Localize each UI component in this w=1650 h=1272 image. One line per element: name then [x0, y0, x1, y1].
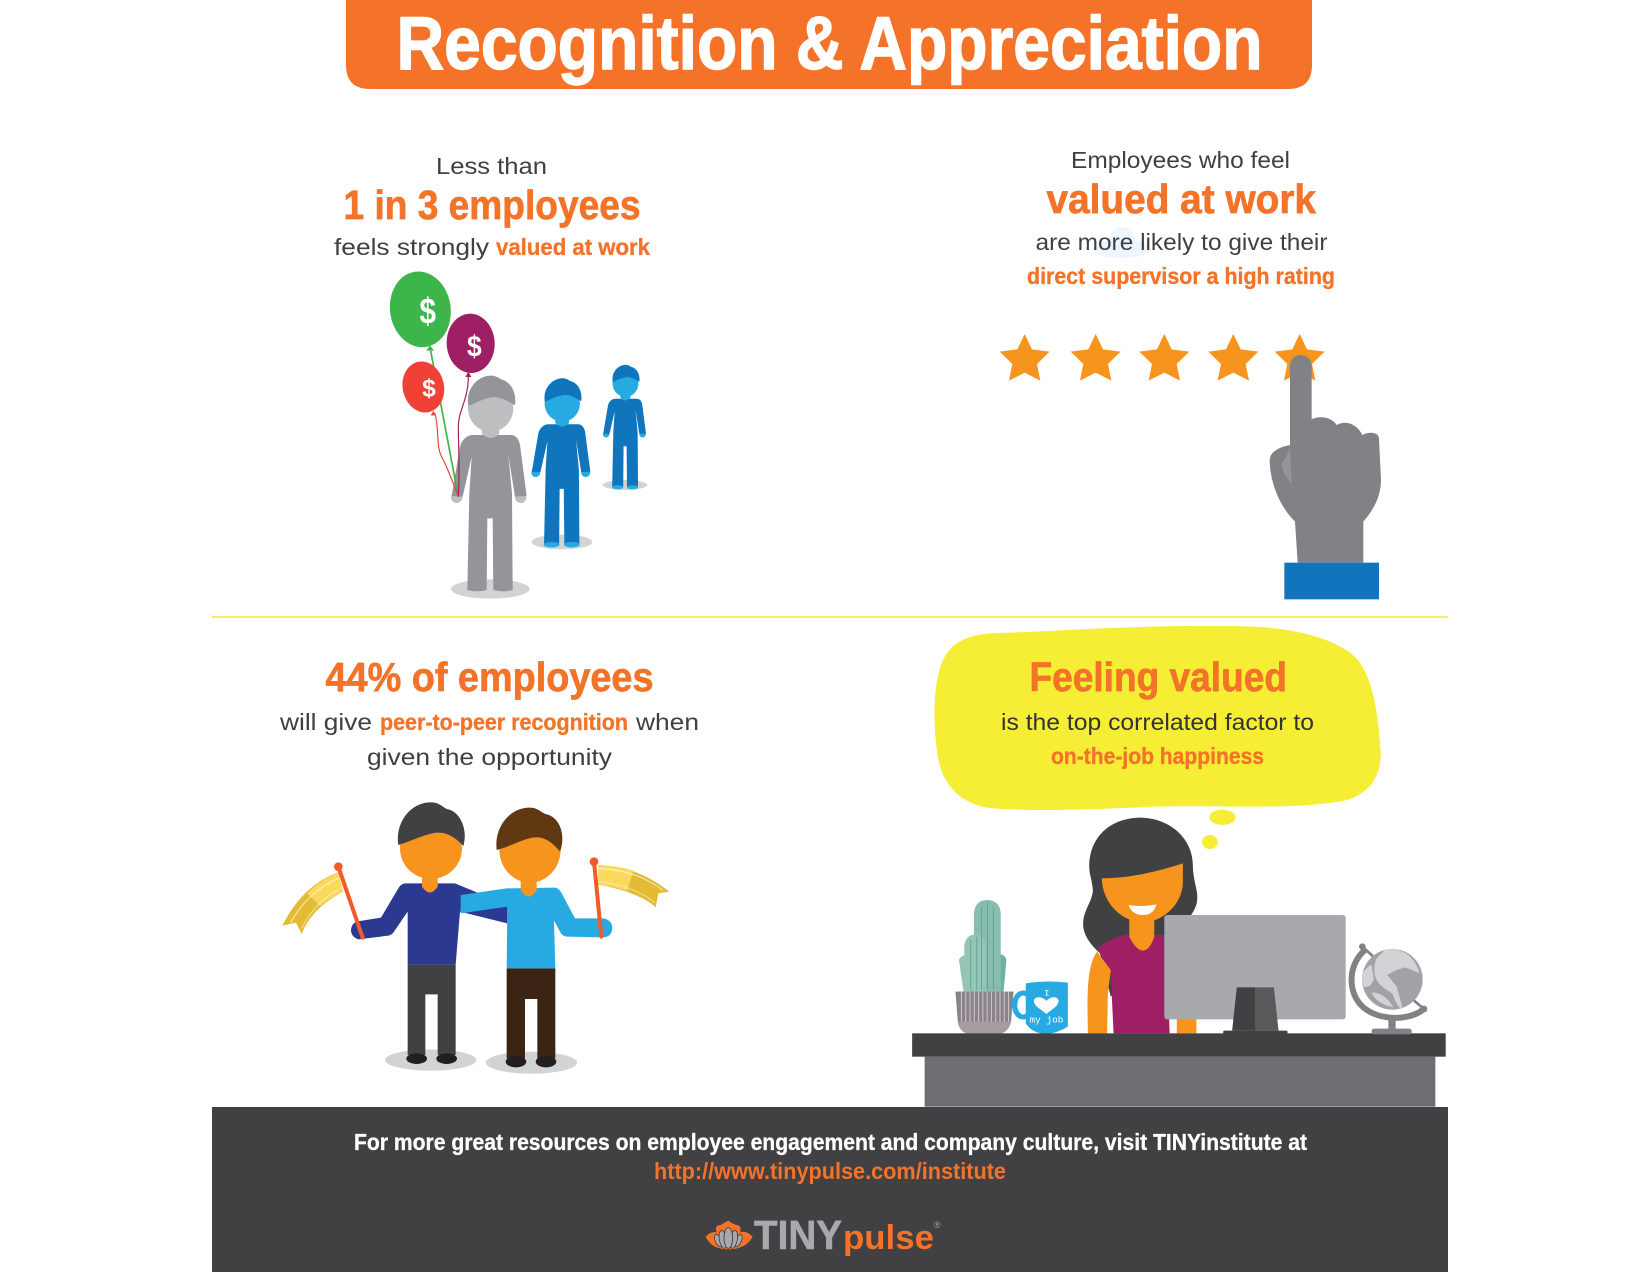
text: peer-to-peer recognition line: will give: [279, 709, 372, 735]
mug: my job: [1029, 1015, 1064, 1026]
text: feels strongly valued at work: valued at work: [496, 234, 651, 260]
five stars: [1000, 334, 1325, 381]
desk: [912, 1033, 1446, 1107]
heading: 1 in 3 employees: 1 in 3 employees: [344, 182, 640, 228]
ground shadows: [385, 1049, 577, 1074]
text: on-the-job happiness: on-the-job happiness: [1051, 743, 1264, 769]
illustration: desk scene: [912, 810, 1446, 1107]
text: given the opportunity: given the opportunity: [367, 744, 612, 770]
heading: 44% of employees: 44% of employees: [326, 654, 654, 700]
smudge: faint cloud behind text: [1093, 227, 1151, 258]
text: employees who feel: Employees who feel: [1071, 147, 1290, 173]
text: peer-to-peer recognition line: [279, 709, 699, 735]
speech bubble: [934, 626, 1381, 810]
footer panel: [212, 1107, 1448, 1272]
globe: [1352, 943, 1427, 1034]
text: top correlated factor: is the top correlated factor to: [1001, 709, 1314, 735]
text: feels strongly valued at work: feels strongly: [334, 234, 489, 260]
logo: TINYpulse: [706, 1212, 941, 1258]
cactus in pot: [955, 900, 1014, 1035]
monitor: [1164, 915, 1346, 1034]
wordmark: pulse: pulse: [843, 1219, 934, 1257]
flag: left ribbon: [282, 872, 343, 934]
mug: I: [1044, 989, 1050, 999]
text: direct supervisor: direct supervisor a high rating: [1027, 263, 1335, 289]
panel: one in three employees: [334, 153, 651, 599]
footer text: For more great resources on employee engagement and company culture, visit TINYinstitute at: [354, 1129, 1307, 1155]
text: feels strongly valued at work: [334, 234, 651, 260]
footer link: http://www.tinypulse.com/institute: [654, 1158, 1006, 1184]
panel: valued at work rating: [1000, 147, 1381, 599]
registered mark: ®: [934, 1220, 941, 1230]
figure: grey person: [451, 376, 527, 591]
wordmark: TINY: TINY: [754, 1212, 842, 1258]
mug: [1015, 981, 1068, 1034]
text: more likely: are more likely to give their: [1036, 229, 1328, 255]
heading: valued at work: valued at work: [1046, 176, 1316, 222]
illustration: two people with flags: [282, 802, 669, 1074]
illustration: people and balloons: [385, 267, 647, 599]
person: dark blue shirt: [351, 802, 507, 1064]
icon: lotus: [706, 1221, 753, 1249]
divider line: [212, 616, 1448, 618]
panel: feeling valued: [912, 626, 1446, 1107]
flag poles: [334, 857, 601, 938]
title banner: Recognition & Appreciation: [396, 1, 1262, 85]
ground shadows: [451, 480, 647, 599]
text: less than: Less than: [436, 153, 547, 179]
thought bubbles: [1202, 810, 1236, 849]
balloon strings: [431, 351, 468, 497]
figure: far blue person: [603, 365, 646, 489]
balloon: green: $: [419, 290, 436, 331]
woman: [1083, 818, 1197, 1033]
balloon: red: $: [422, 374, 436, 402]
flag: right ribbon: [598, 865, 669, 907]
figure: middle blue person: [531, 378, 590, 548]
pointing hand: [1270, 355, 1381, 599]
panel: peer-to-peer recognition: [279, 654, 699, 1074]
balloon: green: [385, 267, 456, 351]
balloon: purple: [445, 312, 496, 377]
illustration: stars and pointing hand: [1000, 334, 1381, 599]
balloon: red: [398, 358, 449, 416]
text: peer-to-peer recognition line: when: [635, 709, 699, 735]
text: peer-to-peer recognition line: peer-to-peer recognition: [380, 709, 628, 735]
balloon: purple: $: [467, 330, 482, 363]
heading: feeling valued: Feeling valued: [1030, 654, 1287, 700]
person: light blue shirt: [461, 808, 612, 1067]
